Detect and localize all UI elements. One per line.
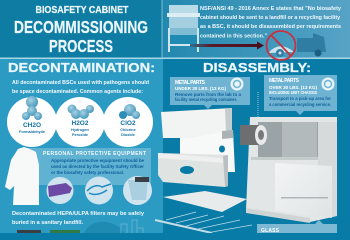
panel: metal parts under 30 lbs: UNDER 30 LBS. (13 KG) <box>175 86 226 91</box>
icon: metal recycling <box>322 78 334 90</box>
chemical: formaldehyde <box>7 96 57 147</box>
panel: metal parts over 30 lbs: OVER 30 LBS. (13 KG) <box>269 85 317 90</box>
chemical: chlorine dioxide: ClO2 <box>120 120 136 127</box>
text block: NSF/ANSI 49 statement <box>200 6 341 40</box>
label: glass <box>257 220 337 234</box>
illustration: cabinet chassis <box>240 92 337 223</box>
panel: metal parts over 30 lbs: INCLUDING UNIT CHASSIS <box>269 90 317 95</box>
panel: metal parts under 30 lbs: facility metal recycling container. <box>175 97 237 102</box>
icon: gloves <box>46 177 74 204</box>
title: DECOMMISSIONING <box>14 17 148 37</box>
panel: personal protective equipment: or the biosafety safety professional. <box>51 170 124 175</box>
panel: metal parts over 30 lbs <box>264 75 337 115</box>
title: PROCESS <box>49 36 113 56</box>
icon: face shield <box>123 176 152 205</box>
heading: disassembly: DISASSEMBLY: <box>203 61 311 75</box>
illustration: disassembled cabinet panels <box>155 108 252 233</box>
panel: personal protective equipment <box>5 147 151 205</box>
panel: metal parts over 30 lbs: Transport to a pick-up area for <box>269 96 331 101</box>
illustration: filters and landfill <box>17 220 143 233</box>
panel: metal parts over 30 lbs: METAL PARTS <box>269 78 300 84</box>
chemical: formaldehyde: CH2O <box>23 122 41 129</box>
chemical: chlorine dioxide: Dioxide <box>121 133 135 137</box>
text block: decontamination intro <box>12 80 149 95</box>
text block: filters <box>12 211 144 226</box>
icon: lab coat <box>5 147 39 205</box>
panel: personal protective equipment: PERSONAL PROTECTIVE EQUIPMENT <box>43 151 146 157</box>
icon: biosafety cabinet outline <box>167 5 200 52</box>
icon: metal recycling <box>230 78 244 90</box>
arrow <box>190 42 264 50</box>
text block: decontamination intro: be space decontaminated. Common agents include: <box>12 89 143 95</box>
text block: filters: Decontaminated HEPA/ULPA filters may be safely <box>12 211 144 217</box>
text block: NSF/ANSI 49 statement: NSF/ANSI 49 - 2016 Annex E states that "No biosafety <box>200 6 341 12</box>
chemical: chlorine dioxide: Chlorine <box>120 128 136 132</box>
text block: NSF/ANSI 49 statement: cabinet should be sent to a landfill or a recycling facility <box>200 15 340 21</box>
text block: NSF/ANSI 49 statement: contained in this section." <box>200 34 268 40</box>
heading: decontamination: DECONTAMINATION: <box>8 61 155 75</box>
panel: metal parts over 30 lbs: a commercial recycling service. <box>269 102 331 107</box>
chemical: chlorine dioxide <box>103 97 153 147</box>
title <box>14 5 148 56</box>
icon: crossed-out truck <box>266 31 326 60</box>
chemical: formaldehyde: Formaldehyde <box>19 130 45 134</box>
panel: personal protective equipment: used as directed by the facility Safety Officer <box>51 164 144 169</box>
chemical: hydrogen peroxide: H2O2 <box>72 120 89 127</box>
chemical: hydrogen peroxide: Hydrogen <box>71 128 90 132</box>
chemical: hydrogen peroxide <box>55 97 105 147</box>
panel: metal parts under 30 lbs <box>170 77 250 109</box>
text block: decontamination intro: All decontaminated BSCs used with pathogens should <box>12 80 149 86</box>
panel: metal parts under 30 lbs: Remove parts from the lab to a <box>175 92 242 97</box>
text block: filters: buried in a sanitary landfill. <box>12 220 84 226</box>
icon: blower fan <box>240 125 267 145</box>
title: BIOSAFETY CABINET <box>36 5 129 16</box>
panel: personal protective equipment: Appropriate protective equipment should be <box>51 158 144 163</box>
chemical: hydrogen peroxide: Peroxide <box>72 133 88 137</box>
icon: safety goggles <box>85 176 113 204</box>
text block: NSF/ANSI 49 statement: as a BSC, it should be disassembled per requirements <box>200 24 341 30</box>
panel: metal parts under 30 lbs: METAL PARTS <box>175 80 206 86</box>
